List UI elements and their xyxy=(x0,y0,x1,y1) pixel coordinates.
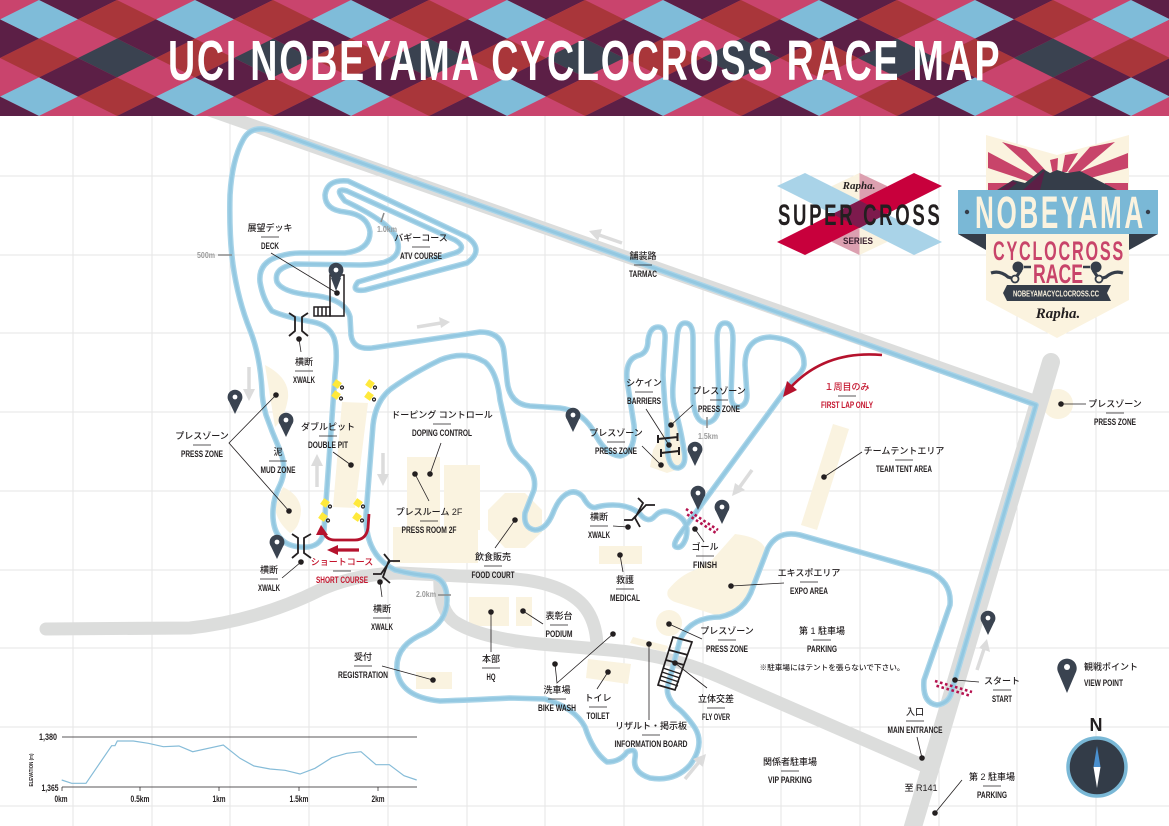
logo: super cross series: SERIES xyxy=(843,236,873,246)
label: medical: MEDICAL xyxy=(610,593,640,603)
label: press zone lower: PRESS ZONE xyxy=(595,446,637,456)
label: press zone lower: プレスゾーン xyxy=(589,428,643,438)
course direction arrows xyxy=(243,229,990,779)
label: doping control xyxy=(391,409,493,477)
label: parking 1: PARKING xyxy=(807,644,837,654)
header banner xyxy=(0,0,1169,116)
label: xwalk south: XWALK xyxy=(371,622,393,632)
label: tarmac: TARMAC xyxy=(629,269,657,279)
label: hq: 本部 xyxy=(482,653,500,664)
roads xyxy=(46,116,1051,826)
label: short course: ショートコース xyxy=(311,557,373,567)
label: xwalk centre: XWALK xyxy=(588,530,610,540)
legend: view point xyxy=(1057,659,1138,693)
label: press zone east: プレスゾーン xyxy=(1088,399,1142,409)
label: finish: ゴール xyxy=(691,541,719,552)
logo: nobeyama cyclocross race: CYCLOCROSS xyxy=(993,236,1123,266)
label: short course xyxy=(311,557,373,585)
icon: crosswalk symbols xyxy=(289,313,655,583)
label: hq xyxy=(482,609,500,682)
label: double pit: ダブルピット xyxy=(301,421,355,432)
legend: view point: VIEW POINT xyxy=(1084,678,1123,688)
label: press zone west: プレスゾーン xyxy=(175,431,229,441)
label: fly over xyxy=(672,660,734,722)
label: first lap only: １周目のみ xyxy=(824,382,870,392)
label: first lap only xyxy=(821,382,873,410)
logo: nobeyama cyclocross race: Rapha. xyxy=(1035,306,1080,322)
title: UCI NOBEYAMA CYCLOCROSS RACE MAP xyxy=(168,29,1000,93)
label: xwalk south west xyxy=(258,559,304,593)
label: atv course: バギーコース xyxy=(394,233,448,243)
label: barriers xyxy=(626,378,672,448)
label: double pit: DOUBLE PIT xyxy=(308,440,348,450)
label: parking 2: PARKING xyxy=(977,790,1007,800)
view point pins xyxy=(228,263,995,635)
distance marker: 1.5km xyxy=(698,417,718,441)
label: xwalk south xyxy=(371,579,393,632)
label: finish: FINISH xyxy=(693,560,717,570)
elevation profile chart: 1km xyxy=(212,794,226,804)
logo: nobeyama cyclocross race: NOBEYAMACYCLOCROSS.CC xyxy=(1013,288,1099,298)
label: first lap only: FIRST LAP ONLY xyxy=(821,400,873,410)
label: xwalk north: XWALK xyxy=(293,375,315,385)
icon: fly over bridge xyxy=(658,637,692,690)
label: barriers: BARRIERS xyxy=(627,396,661,406)
icon: yellow pit flags xyxy=(318,379,376,522)
first lap red arrow xyxy=(783,354,882,397)
label: expo area xyxy=(728,568,840,596)
label: toilet xyxy=(584,669,612,721)
label: parking 1 xyxy=(799,625,845,654)
label: fly over: 立体交差 xyxy=(698,693,734,704)
label: press zone chicane: プレスゾーン xyxy=(692,386,746,396)
label: tarmac: 舗装路 xyxy=(629,250,657,261)
distance marker: 2.0km xyxy=(416,589,451,599)
label: press zone chicane: PRESS ZONE xyxy=(698,404,740,414)
label: vip parking: 関係者駐車場 xyxy=(763,756,817,767)
compass xyxy=(1068,715,1126,796)
label: press zone west xyxy=(175,392,292,514)
label: deck: DECK xyxy=(261,241,279,251)
elevation profile chart: ELEVATION (m) xyxy=(29,753,35,786)
label: medical: 救護 xyxy=(616,574,634,585)
label: toilet: TOILET xyxy=(586,711,610,721)
parking note: ※駐車場にはテントを張らないで下さい。 xyxy=(760,663,904,672)
label: deck: 展望デッキ xyxy=(247,222,293,233)
label: xwalk north xyxy=(293,336,315,385)
distance marker: 1.0km xyxy=(377,213,397,234)
finish checkered line xyxy=(685,509,718,533)
label: information board: リザルト・掲示板 xyxy=(615,720,687,731)
label: podium: PODIUM xyxy=(546,629,572,639)
race course track xyxy=(230,129,1036,779)
label: podium xyxy=(520,608,573,639)
label: information board xyxy=(614,641,688,749)
label: main entrance xyxy=(888,707,942,761)
label: toilet: トイレ xyxy=(584,693,612,703)
label: press zone east xyxy=(1058,399,1142,427)
elevation profile chart: 1.5km xyxy=(290,794,308,804)
label: mud zone xyxy=(260,447,296,475)
label: main entrance: MAIN ENTRANCE xyxy=(888,725,942,735)
label: main entrance: 入口 xyxy=(906,707,924,717)
label: bike wash: BIKE WASH xyxy=(538,703,576,713)
label: expo area: EXPO AREA xyxy=(790,586,828,596)
label: short course: SHORT COURSE xyxy=(316,575,368,585)
label: xwalk south west: 横断 xyxy=(260,564,278,575)
label: registration: REGISTRATION xyxy=(338,670,388,680)
label: doping control: DOPING CONTROL xyxy=(412,428,472,438)
label: start: スタート xyxy=(984,675,1020,686)
label: hq: HQ xyxy=(486,672,496,682)
label: press zone east: PRESS ZONE xyxy=(1094,417,1136,427)
label: vip parking: VIP PARKING xyxy=(768,775,812,785)
label: double pit xyxy=(301,421,355,468)
logo: nobeyama cyclocross race xyxy=(958,135,1158,338)
icon: barriers xyxy=(658,433,679,457)
label: team tent area xyxy=(821,446,944,480)
label: registration: 受付 xyxy=(354,651,372,662)
elevation profile chart xyxy=(29,732,417,804)
venue areas xyxy=(265,365,1073,689)
label: deck xyxy=(247,222,340,296)
label: xwalk centre xyxy=(588,511,631,540)
label: expo area: エキスポエリア xyxy=(778,568,840,578)
label: medical xyxy=(610,552,640,603)
label: barriers: シケイン xyxy=(626,378,662,388)
label: start xyxy=(952,675,1020,704)
label: to route 141: 至 R141 xyxy=(904,783,938,793)
label: parking 2: 第 2 駐車場 xyxy=(969,771,1015,782)
label: fly over: FLY OVER xyxy=(702,712,730,722)
label: team tent area: チームテントエリア xyxy=(864,446,944,456)
label: doping control: ドーピング コントロール xyxy=(391,409,493,420)
label: atv course: ATV COURSE xyxy=(400,251,442,261)
label: press zone lower xyxy=(589,428,664,468)
label: podium: 表彰台 xyxy=(545,610,573,621)
logo: super cross series: SUPER CROSS xyxy=(778,199,940,232)
label: parking 1: 第 1 駐車場 xyxy=(799,625,845,636)
label: press room xyxy=(396,471,463,535)
label: registration xyxy=(338,651,436,683)
legend: view point: 観戦ポイント xyxy=(1084,661,1138,672)
logo: super cross series xyxy=(777,173,942,255)
label: press zone centre: PRESS ZONE xyxy=(706,644,748,654)
distance marker: 500m: 500m xyxy=(197,250,215,260)
label: start: START xyxy=(992,694,1012,704)
elevation profile chart: 0.5km xyxy=(130,794,150,804)
label: press zone chicane xyxy=(668,386,746,428)
elevation profile chart: 0km xyxy=(54,794,68,804)
label: bike wash: 洗車場 xyxy=(543,684,571,695)
compass: N xyxy=(1090,715,1102,735)
label: press zone centre: プレスゾーン xyxy=(700,626,754,636)
label: press zone west: PRESS ZONE xyxy=(181,449,223,459)
label: xwalk south: 横断 xyxy=(373,603,391,614)
logo: nobeyama cyclocross race: RACE xyxy=(1033,259,1083,289)
label: parking 2 xyxy=(932,771,1015,816)
label: food court: 飲食販売 xyxy=(475,551,511,562)
label: mud zone: MUD ZONE xyxy=(260,465,296,475)
elevation profile chart: 2km xyxy=(372,794,384,804)
start checkered line xyxy=(934,681,972,696)
label: team tent area: TEAM TENT AREA xyxy=(876,464,932,474)
icon: viewing deck xyxy=(314,275,344,316)
label: xwalk centre: 横断 xyxy=(590,511,608,522)
label: information board: INFORMATION BOARD xyxy=(614,739,688,749)
label: mud zone: 泥 xyxy=(273,447,283,457)
elevation profile chart: 1,365 xyxy=(42,783,58,793)
distance marker: 1.0km: 1.0km xyxy=(377,224,397,234)
label: finish xyxy=(691,526,719,570)
short course red route xyxy=(316,514,369,555)
logo: super cross series: Rapha. xyxy=(842,180,875,192)
label: tarmac xyxy=(629,250,657,279)
distance marker: 500m xyxy=(197,250,232,260)
label: press zone centre xyxy=(666,621,754,654)
label: food court xyxy=(472,517,518,580)
label: press room: プレスルーム 2F xyxy=(396,507,463,517)
label: food court: FOOD COURT xyxy=(472,570,515,580)
label: atv course xyxy=(394,233,448,261)
label: press room: PRESS ROOM 2F xyxy=(402,525,457,535)
distance marker: 1.5km: 1.5km xyxy=(698,431,718,441)
distance marker: 2.0km: 2.0km xyxy=(416,589,436,599)
label: xwalk south west: XWALK xyxy=(258,583,280,593)
elevation profile chart: 1,380 xyxy=(39,732,57,742)
label: xwalk north: 横断 xyxy=(295,356,313,367)
label: vip parking xyxy=(763,756,817,785)
label: bike wash xyxy=(538,631,616,713)
logo: nobeyama cyclocross race: NOBEYAMA xyxy=(975,188,1143,238)
